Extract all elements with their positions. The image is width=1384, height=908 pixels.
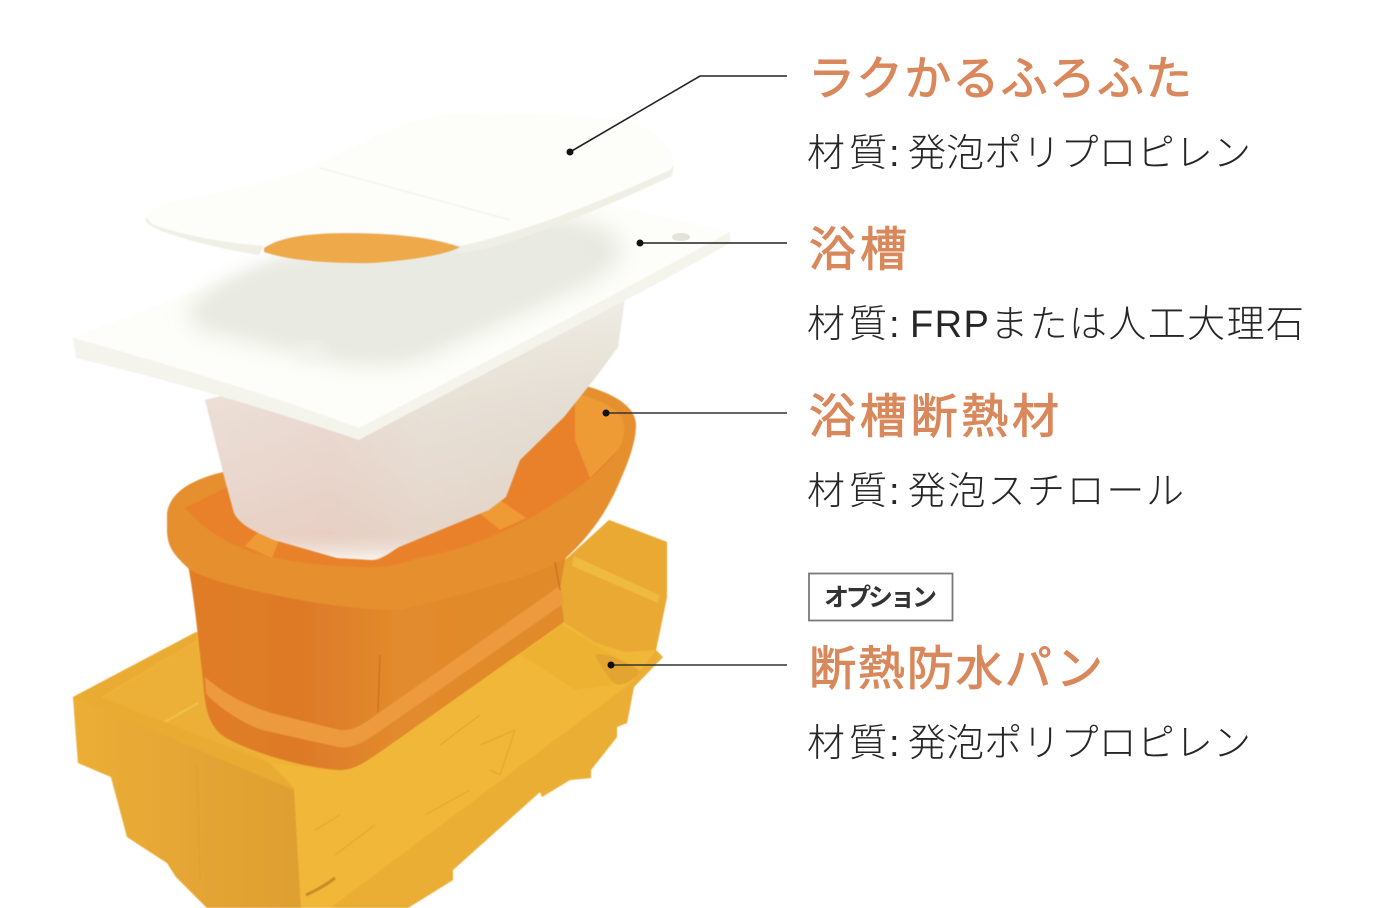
leader line: lid [566,76,787,156]
material: bathtub: 材質 [807,304,887,346]
pan: front wall [73,697,301,908]
illustration: insulated waterproof pan [73,520,667,908]
material: lid: 発泡ポリプロピレン [908,133,1251,175]
bathtub basin [189,217,622,365]
leader line: bathtub [636,240,787,246]
material: lid: 材質 [807,133,887,175]
insulation: rim [167,385,636,610]
insulation: outer body [187,555,566,770]
material: insulation: 材質 [807,471,887,513]
pan: floor [270,622,656,908]
illustration: bathtub insulation [167,385,636,770]
option badge [809,574,952,620]
material: bathtub: : [889,304,900,346]
material: pan: 発泡ポリプロピレン [908,723,1251,765]
material: pan: : [889,723,900,765]
leader line: pan [608,662,787,668]
pan: right outer wall [330,650,663,908]
material: insulation: 発泡スチロール [908,471,1184,513]
pan: inner left trough [101,642,272,766]
option badge: オプション [824,584,937,612]
insulation: rim inner [185,393,624,567]
heading: bathtub: 浴槽 [809,223,907,276]
lid orange grip [264,233,460,263]
illustration: lid [146,113,674,263]
material: lid: : [889,133,900,175]
pan: upper right inner wall [560,520,667,655]
bathtub drain hole [672,233,690,241]
heading: insulated waterproof pan: 断熱防水パン [809,642,1103,695]
illustration: bathtub [73,203,730,560]
heading: lid: ラクかるふろふた [808,52,1192,105]
leader line: insulation [602,410,787,416]
bathtub body [205,297,625,560]
material: bathtub: FRPまたは人工大理石 [910,304,1304,346]
material: insulation: : [889,471,900,513]
lid top surface [146,113,674,246]
insulation: band [205,585,563,747]
lid side edge [146,165,674,255]
material: pan: 材質 [807,723,887,765]
insulation: inner ledges [245,393,624,558]
heading: bathtub insulation: 浴槽断熱材 [809,390,1059,443]
bathtub rim [73,203,730,440]
